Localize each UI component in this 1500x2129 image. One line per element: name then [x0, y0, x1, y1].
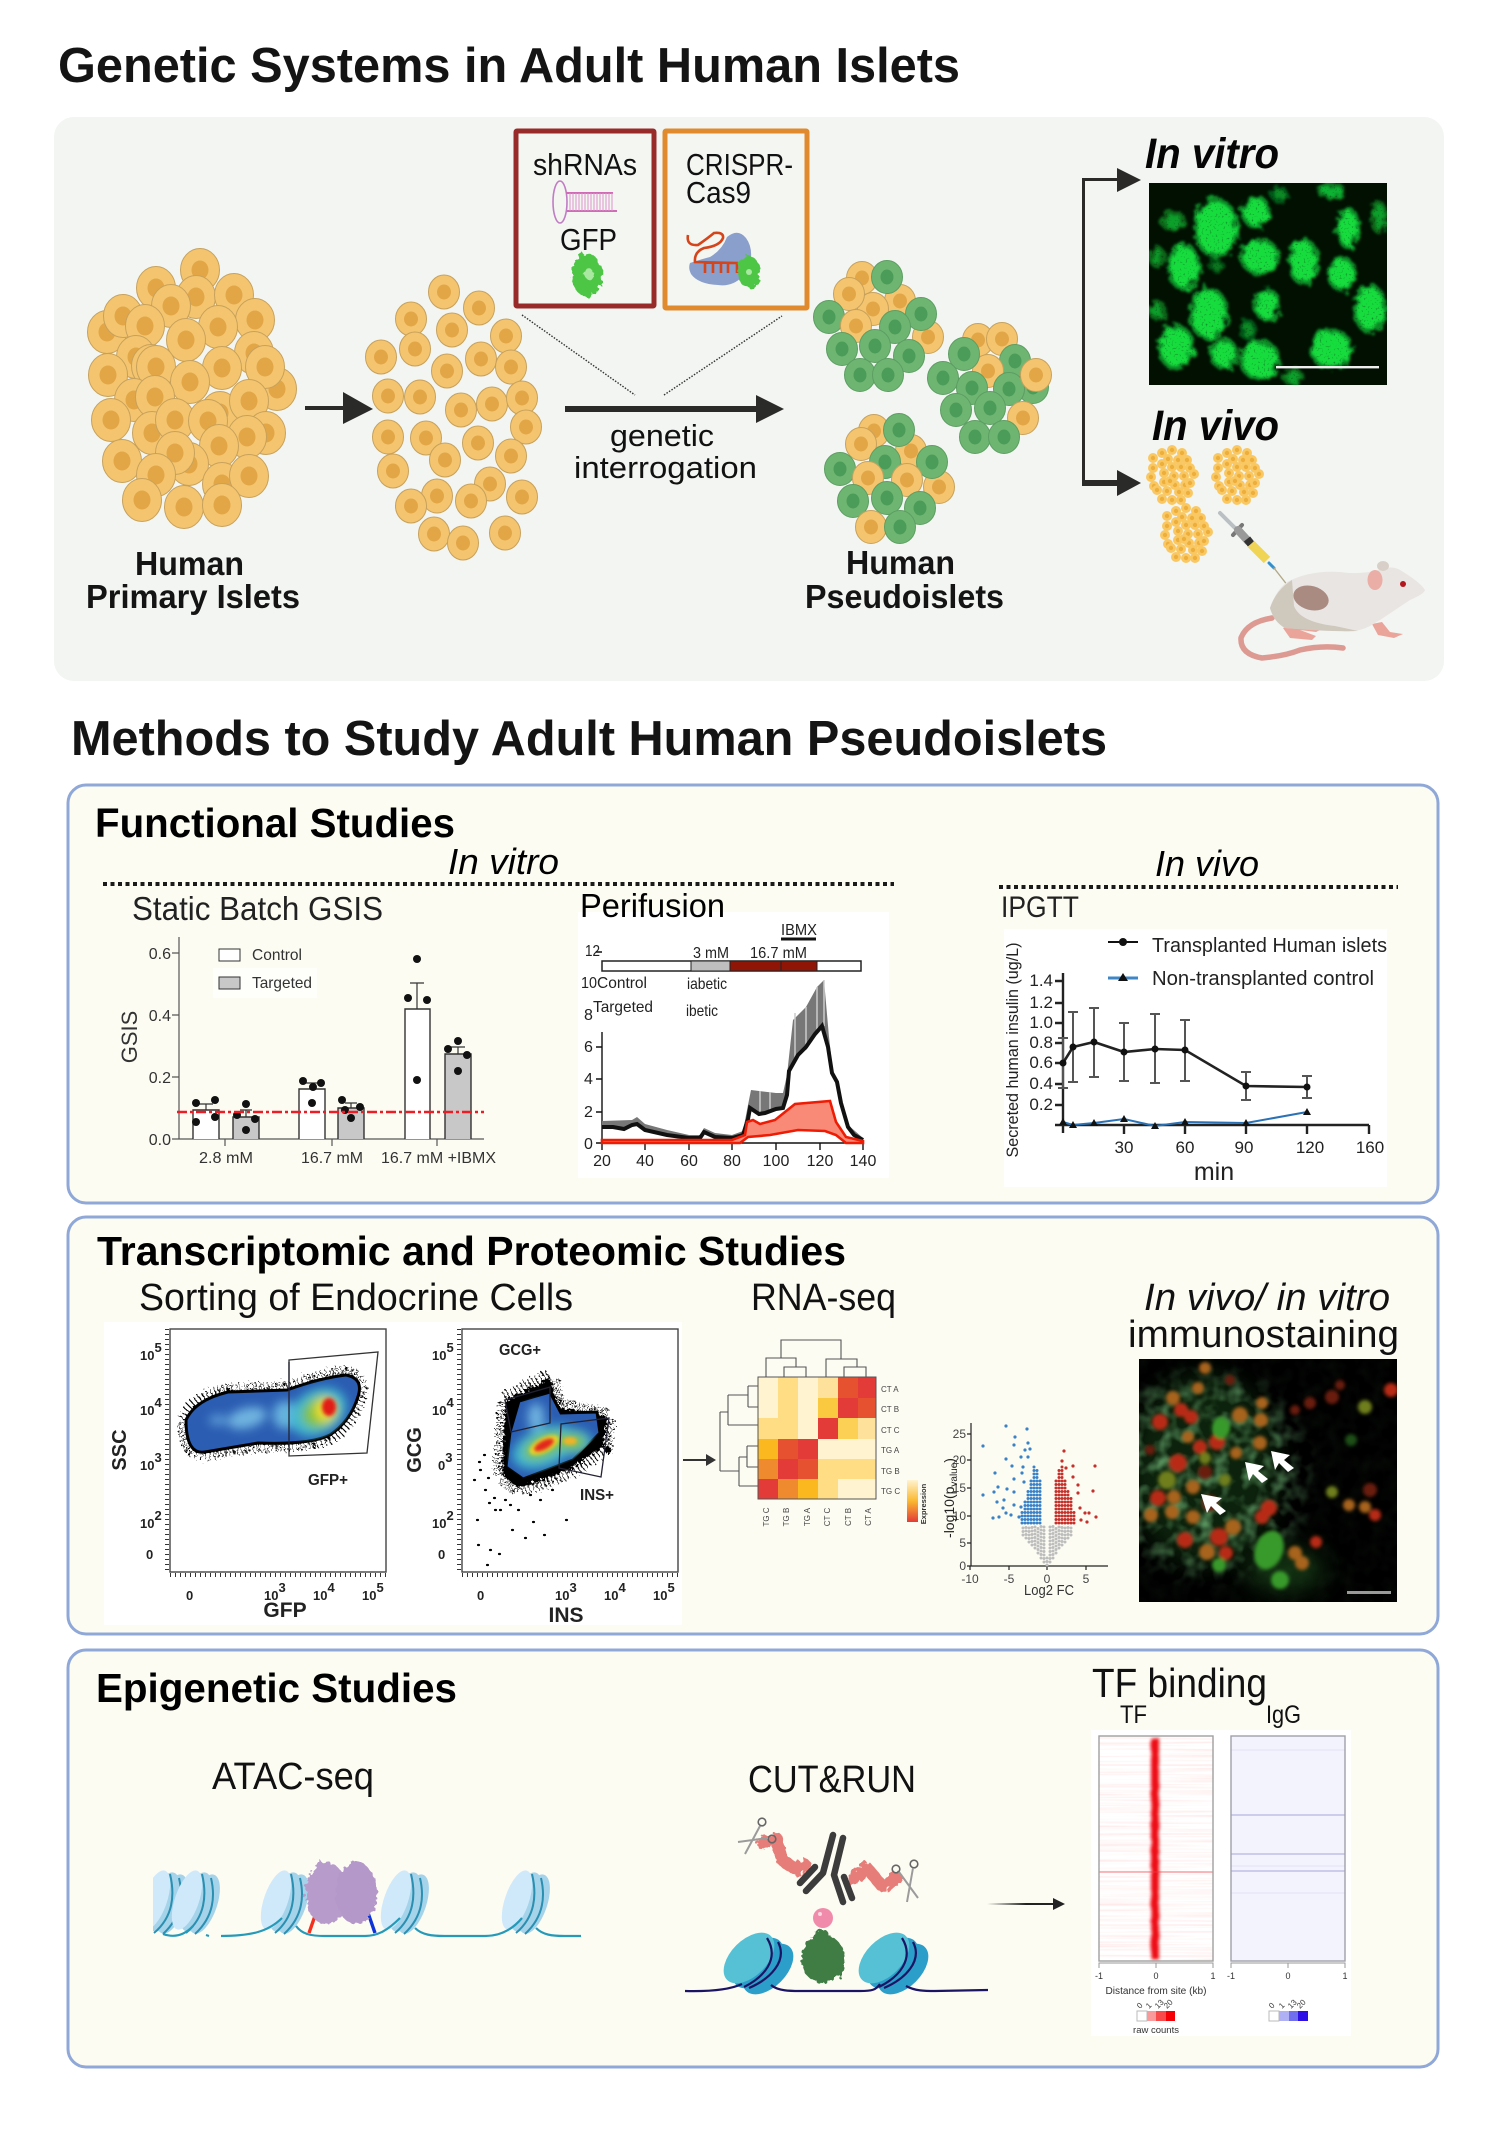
image: immunostaining micrograph [1131, 1359, 1398, 1602]
heatmap: RNA-seq clustering: CT B [844, 1508, 853, 1526]
label: human pseudoislets: Human [846, 544, 955, 581]
flow plot: GFP vs SSC: 10 [140, 1348, 154, 1363]
bar chart: static batch GSIS: 0.0 [149, 1132, 171, 1149]
volcano plot: 20 [953, 1453, 966, 1467]
line chart: perifusion: 60 [680, 1153, 698, 1170]
flow plot: GFP vs SSC [109, 1329, 386, 1622]
volcano plot: ) [941, 1458, 957, 1463]
volcano plot: 5 [959, 1536, 966, 1550]
bar chart: static batch GSIS [117, 937, 496, 1167]
line chart: perifusion: iabetic [687, 976, 727, 993]
flow plot: GFP vs SSC: GFP [263, 1599, 307, 1622]
flow plot: GFP vs SSC: 3 [154, 1450, 162, 1465]
label: genetic interrogation: genetic [610, 418, 714, 453]
heatmap: RNA-seq clustering: TG A [881, 1446, 900, 1455]
bar chart: static batch GSIS: Targeted [252, 975, 312, 992]
red trace [602, 1101, 863, 1143]
flow plot: GFP vs SSC: 2 [154, 1508, 162, 1523]
line chart: IPGTT: 1.0 [1029, 1013, 1053, 1032]
volcano plot: -log10(p [941, 1487, 957, 1538]
bar chart: static batch GSIS: 16.7 mM [301, 1150, 363, 1167]
flow plot: GFP vs SSC: 4 [327, 1580, 335, 1595]
label: genetic interrogation: interrogation [574, 450, 757, 485]
line chart: IPGTT: 0.4 [1029, 1074, 1053, 1093]
line chart: perifusion: 16.7 mM [750, 945, 807, 962]
chart: TF and IgG heatmaps: 20 [1162, 1997, 1175, 2010]
chart: TF and IgG heatmaps: 1 [1342, 1971, 1348, 1981]
line chart: IPGTT: 120 [1296, 1138, 1324, 1157]
icon: hairpin [553, 181, 617, 223]
panel: transcriptomic and proteomic studies [68, 1217, 1438, 1634]
icon: GFP protein [572, 253, 602, 297]
chart: TF and IgG heatmaps: 1 [1277, 2001, 1287, 2010]
flow plot: GFP vs SSC: 10 [313, 1588, 327, 1603]
volcano plot: 0 [1044, 1572, 1051, 1586]
label: TF binding: TF binding [1092, 1660, 1267, 1706]
line chart: perifusion: 6 [584, 1039, 593, 1056]
arrow: islets to dispersed cells [305, 392, 373, 424]
label: ATAC-seq: ATAC-seq [212, 1756, 374, 1798]
panel: genetic systems [54, 117, 1444, 681]
bar chart: static batch GSIS: GSIS [117, 1011, 142, 1063]
line chart: IPGTT: 60 [1176, 1138, 1194, 1157]
label: in vivo: In vivo [1155, 843, 1259, 884]
label: human primary islets: Human [135, 545, 244, 582]
label: in vitro: In vitro [448, 841, 559, 882]
volcano plot: 0 [959, 1559, 966, 1573]
cell cluster: dispersed cells [366, 275, 542, 560]
chart: TF and IgG heatmaps: 0 [1285, 1971, 1291, 1981]
line chart: perifusion: 3 mM [693, 945, 729, 962]
line chart: IPGTT: Transplanted Human islets [1152, 935, 1387, 957]
line chart: perifusion: 80 [723, 1153, 741, 1170]
heatmap: RNA-seq clustering [720, 1340, 928, 1527]
label: in vitro: In vitro [1145, 130, 1279, 178]
heatmap: RNA-seq clustering: CT C [881, 1426, 900, 1435]
diagram: CUT&RUN [685, 1818, 988, 2004]
title: genetic systems: Genetic Systems in Adult Human Islets [58, 39, 960, 93]
bar chart: static batch GSIS: 0.4 [149, 1008, 171, 1025]
chart: TF and IgG heatmaps [1091, 1701, 1351, 2036]
flow plot: INS vs GCG: 5 [667, 1580, 675, 1595]
heading: epigenetic studies: Epigenetic Studies [96, 1665, 457, 1711]
label: IPGTT: IPGTT [1001, 891, 1079, 924]
flow plot: GFP vs SSC: 3 [278, 1580, 286, 1595]
chart: TF and IgG heatmaps: TF [1120, 1701, 1147, 1729]
line chart: IPGTT: 30 [1115, 1138, 1133, 1157]
label: human primary islets: Primary Islets [86, 578, 300, 615]
arrow: bracket to in vitro and in vivo [1082, 168, 1141, 496]
label: in vivo: In vivo [1152, 402, 1279, 450]
volcano plot: -10 [961, 1572, 979, 1586]
line chart: perifusion: IBMX [781, 922, 817, 939]
heatmap: RNA-seq clustering: TG C [762, 1507, 771, 1527]
line chart: perifusion: 10 [581, 975, 597, 992]
dotted connector lines [522, 315, 782, 395]
flow plot: INS vs GCG [404, 1329, 678, 1627]
cell cluster: human primary islets [88, 248, 296, 528]
flow plot: INS vs GCG: 3 [445, 1450, 452, 1465]
flow plot: INS vs GCG: INS+ [580, 1487, 614, 1504]
line chart: perifusion: 0 [584, 1136, 593, 1153]
box: shRNAs and GFP: GFP [560, 223, 617, 257]
chart: TF and IgG heatmaps: 20 [1295, 1997, 1308, 2010]
box: CRISPR-Cas9 [665, 131, 807, 308]
bar chart: static batch GSIS: 2.8 mM [199, 1150, 253, 1167]
flow plot: INS vs GCG: 10 [604, 1588, 618, 1603]
label: human pseudoislets: Pseudoislets [805, 578, 1004, 615]
volcano plot [941, 1423, 1108, 1599]
label: CUT&RUN: CUT&RUN [748, 1759, 916, 1801]
flow plot: GFP vs SSC: 4 [154, 1395, 162, 1410]
line chart: perifusion: 8 [584, 1007, 593, 1024]
volcano plot: value [949, 1462, 960, 1487]
chart: TF and IgG heatmaps: raw counts [1133, 2025, 1179, 2036]
chart: TF and IgG heatmaps: 13 [1153, 1997, 1166, 2010]
flow plot: GFP vs SSC: 10 [362, 1588, 376, 1603]
heading: functional studies: Functional Studies [95, 800, 455, 846]
flow plot: GFP vs SSC: 10 [140, 1403, 154, 1418]
box: CRISPR-Cas9: CRISPR- [686, 148, 793, 182]
label: in vivo / in vitro immunostaining: In vivo/ in vitro [1144, 1277, 1390, 1319]
volcano plot: 5 [1083, 1572, 1090, 1586]
heading: transcriptomic and proteomic studies: Transcriptomic and Proteomic Studies [97, 1228, 846, 1274]
flow plot: GFP vs SSC: 10 [140, 1458, 154, 1473]
flow plot: GFP vs SSC: 0 [186, 1588, 193, 1603]
flow plot: INS vs GCG: 0 [438, 1458, 445, 1473]
flow plot: GFP vs SSC: 10 [140, 1516, 154, 1531]
heatmap: RNA-seq clustering: TG B [782, 1508, 791, 1526]
chart: TF and IgG heatmaps: 0 [1153, 1971, 1159, 1981]
heatmap: RNA-seq clustering: CT A [864, 1508, 873, 1526]
flow plot: INS vs GCG: GCG+ [499, 1342, 541, 1359]
panel: functional studies [68, 785, 1438, 1203]
box: shRNAs and GFP: shRNAs [533, 148, 637, 182]
arrow: CUT&RUN to TF binding [987, 1898, 1065, 1910]
line chart: IPGTT [1003, 929, 1387, 1187]
volcano plot: 15 [953, 1481, 966, 1495]
line chart: IPGTT: Secreted human insulin (ug/L) [1003, 942, 1022, 1158]
line chart: perifusion: 120 [807, 1153, 833, 1170]
icon: mouse [1241, 561, 1425, 658]
line chart: IPGTT: 160 [1356, 1138, 1384, 1157]
flow plot: INS vs GCG: 4 [446, 1395, 454, 1410]
line chart: perifusion: 140 [850, 1153, 876, 1170]
line chart: perifusion: ibetic [686, 1003, 718, 1020]
flow plot: GFP vs SSC: 0 [146, 1547, 153, 1562]
volcano plot: 25 [953, 1427, 966, 1441]
label: in vivo / in vitro immunostaining: immunostaining [1128, 1314, 1399, 1356]
flow plot: GFP vs SSC: 5 [154, 1340, 162, 1355]
flow plot: INS vs GCG: 5 [446, 1340, 454, 1355]
line chart: perifusion: 100 [763, 1153, 789, 1170]
arrow: flow to RNA-seq [683, 1454, 716, 1466]
volcano plot: Log2 FC [1024, 1582, 1074, 1599]
line chart: IPGTT: 0.2 [1029, 1095, 1053, 1114]
line chart: perifusion: 20 [593, 1153, 611, 1170]
box: CRISPR-Cas9: Cas9 [686, 176, 751, 210]
flow plot: INS vs GCG: 10 [653, 1588, 667, 1603]
image: green fluorescent pseudoislets [1149, 183, 1387, 385]
flow plot: INS vs GCG: GCG [404, 1427, 426, 1473]
flow plot: INS vs GCG: 3 [569, 1580, 577, 1595]
chart: TF and IgG heatmaps: IgG [1266, 1701, 1301, 1729]
flow plot: INS vs GCG: 4 [618, 1580, 626, 1595]
line chart: perifusion: 2 [584, 1104, 593, 1121]
flow plot: GFP vs SSC: 10 [264, 1588, 278, 1603]
label: in vivo / in vitro immunostaining [1128, 1277, 1399, 1356]
flow plot: INS vs GCG: 10 [555, 1588, 569, 1603]
label: RNA-seq: RNA-seq [751, 1277, 896, 1319]
bar chart: static batch GSIS: 0.6 [149, 946, 171, 963]
line chart: IPGTT: 0.8 [1029, 1033, 1053, 1052]
cell cluster: pseudoislets [814, 260, 1052, 544]
icon: small islets [1146, 445, 1264, 563]
line chart: IPGTT: 1.4 [1029, 971, 1053, 990]
line chart: IPGTT: min [1194, 1158, 1234, 1186]
line chart: perifusion: 4 [584, 1071, 593, 1088]
label: static batch GSIS: Static Batch GSIS [132, 890, 383, 927]
flow plot: INS vs GCG: 0 [438, 1547, 445, 1562]
heatmap: RNA-seq clustering: TG B [881, 1467, 900, 1476]
heatmap: RNA-seq clustering: CT A [881, 1385, 899, 1394]
flow plot: GFP vs SSC: 5 [376, 1580, 384, 1595]
heatmap: RNA-seq clustering: CT B [881, 1405, 899, 1414]
flow plot: INS vs GCG: 0 [477, 1588, 484, 1603]
chart: TF and IgG heatmaps: -1 [1227, 1971, 1235, 1981]
line chart: perifusion: 40 [636, 1153, 654, 1170]
arrow: genetic interrogation [565, 395, 784, 423]
flow plot: INS vs GCG: 10 [432, 1516, 446, 1531]
flow cytometry plots [104, 1322, 682, 1627]
icon: Cas9 with guide RNA [688, 233, 760, 288]
flow plot: INS vs GCG: 10 [432, 1348, 446, 1363]
chart: TF and IgG heatmaps: 0 [1267, 2001, 1277, 2010]
line chart: IPGTT: Non-transplanted control [1152, 968, 1374, 990]
heatmap: RNA-seq clustering: Expression [919, 1483, 928, 1524]
bar chart: static batch GSIS: 0.2 [149, 1070, 171, 1087]
diagram: ATAC-seq nucleosomes and transposase [134, 1862, 581, 1938]
label: sorting of endocrine cells: Sorting of Endocrine Cells [139, 1277, 573, 1319]
black trace [602, 1026, 863, 1140]
flow plot: INS vs GCG: 10 [432, 1403, 446, 1418]
line chart: perifusion [578, 912, 889, 1178]
heatmap: RNA-seq clustering: TG C [881, 1487, 900, 1496]
heatmap: RNA-seq clustering: CT C [823, 1508, 832, 1526]
line chart: IPGTT: 90 [1235, 1138, 1253, 1157]
flow plot: GFP vs SSC: SSC [109, 1429, 131, 1471]
heatmap: RNA-seq clustering: TG A [803, 1507, 812, 1526]
title: methods: Methods to Study Adult Human Pseudoislets [71, 712, 1107, 766]
label: perifusion: Perifusion [580, 887, 725, 924]
upper error band [602, 980, 863, 1140]
flow plot: INS vs GCG: 2 [446, 1508, 454, 1523]
icon: syringe [1220, 513, 1288, 586]
bar chart: static batch GSIS: Control [252, 947, 302, 964]
line chart: perifusion: Targeted [593, 999, 653, 1016]
volcano plot: 10 [953, 1509, 966, 1523]
chart: TF and IgG heatmaps: Distance from site (kb) [1106, 1986, 1206, 1997]
line chart: IPGTT: 1.2 [1029, 993, 1053, 1012]
chart: TF and IgG heatmaps: 0 [1135, 2001, 1145, 2010]
chart: TF and IgG heatmaps: 13 [1286, 1997, 1299, 2010]
line chart: perifusion: 12 [585, 943, 600, 960]
flow plot: GFP vs SSC: GFP+ [308, 1472, 348, 1489]
line chart: IPGTT: 0.6 [1029, 1053, 1053, 1072]
volcano plot: -5 [1004, 1572, 1015, 1586]
chart: TF and IgG heatmaps: 1 [1144, 2001, 1154, 2010]
chart: TF and IgG heatmaps: 1 [1210, 1971, 1216, 1981]
panel: epigenetic studies [68, 1650, 1438, 2067]
line chart: perifusion: Control [597, 975, 647, 992]
bar chart: static batch GSIS: 16.7 mM +IBMX [381, 1150, 496, 1167]
chart: TF and IgG heatmaps: -1 [1095, 1971, 1103, 1981]
box: shRNAs and GFP [516, 131, 654, 306]
flow plot: INS vs GCG: INS [548, 1604, 584, 1627]
